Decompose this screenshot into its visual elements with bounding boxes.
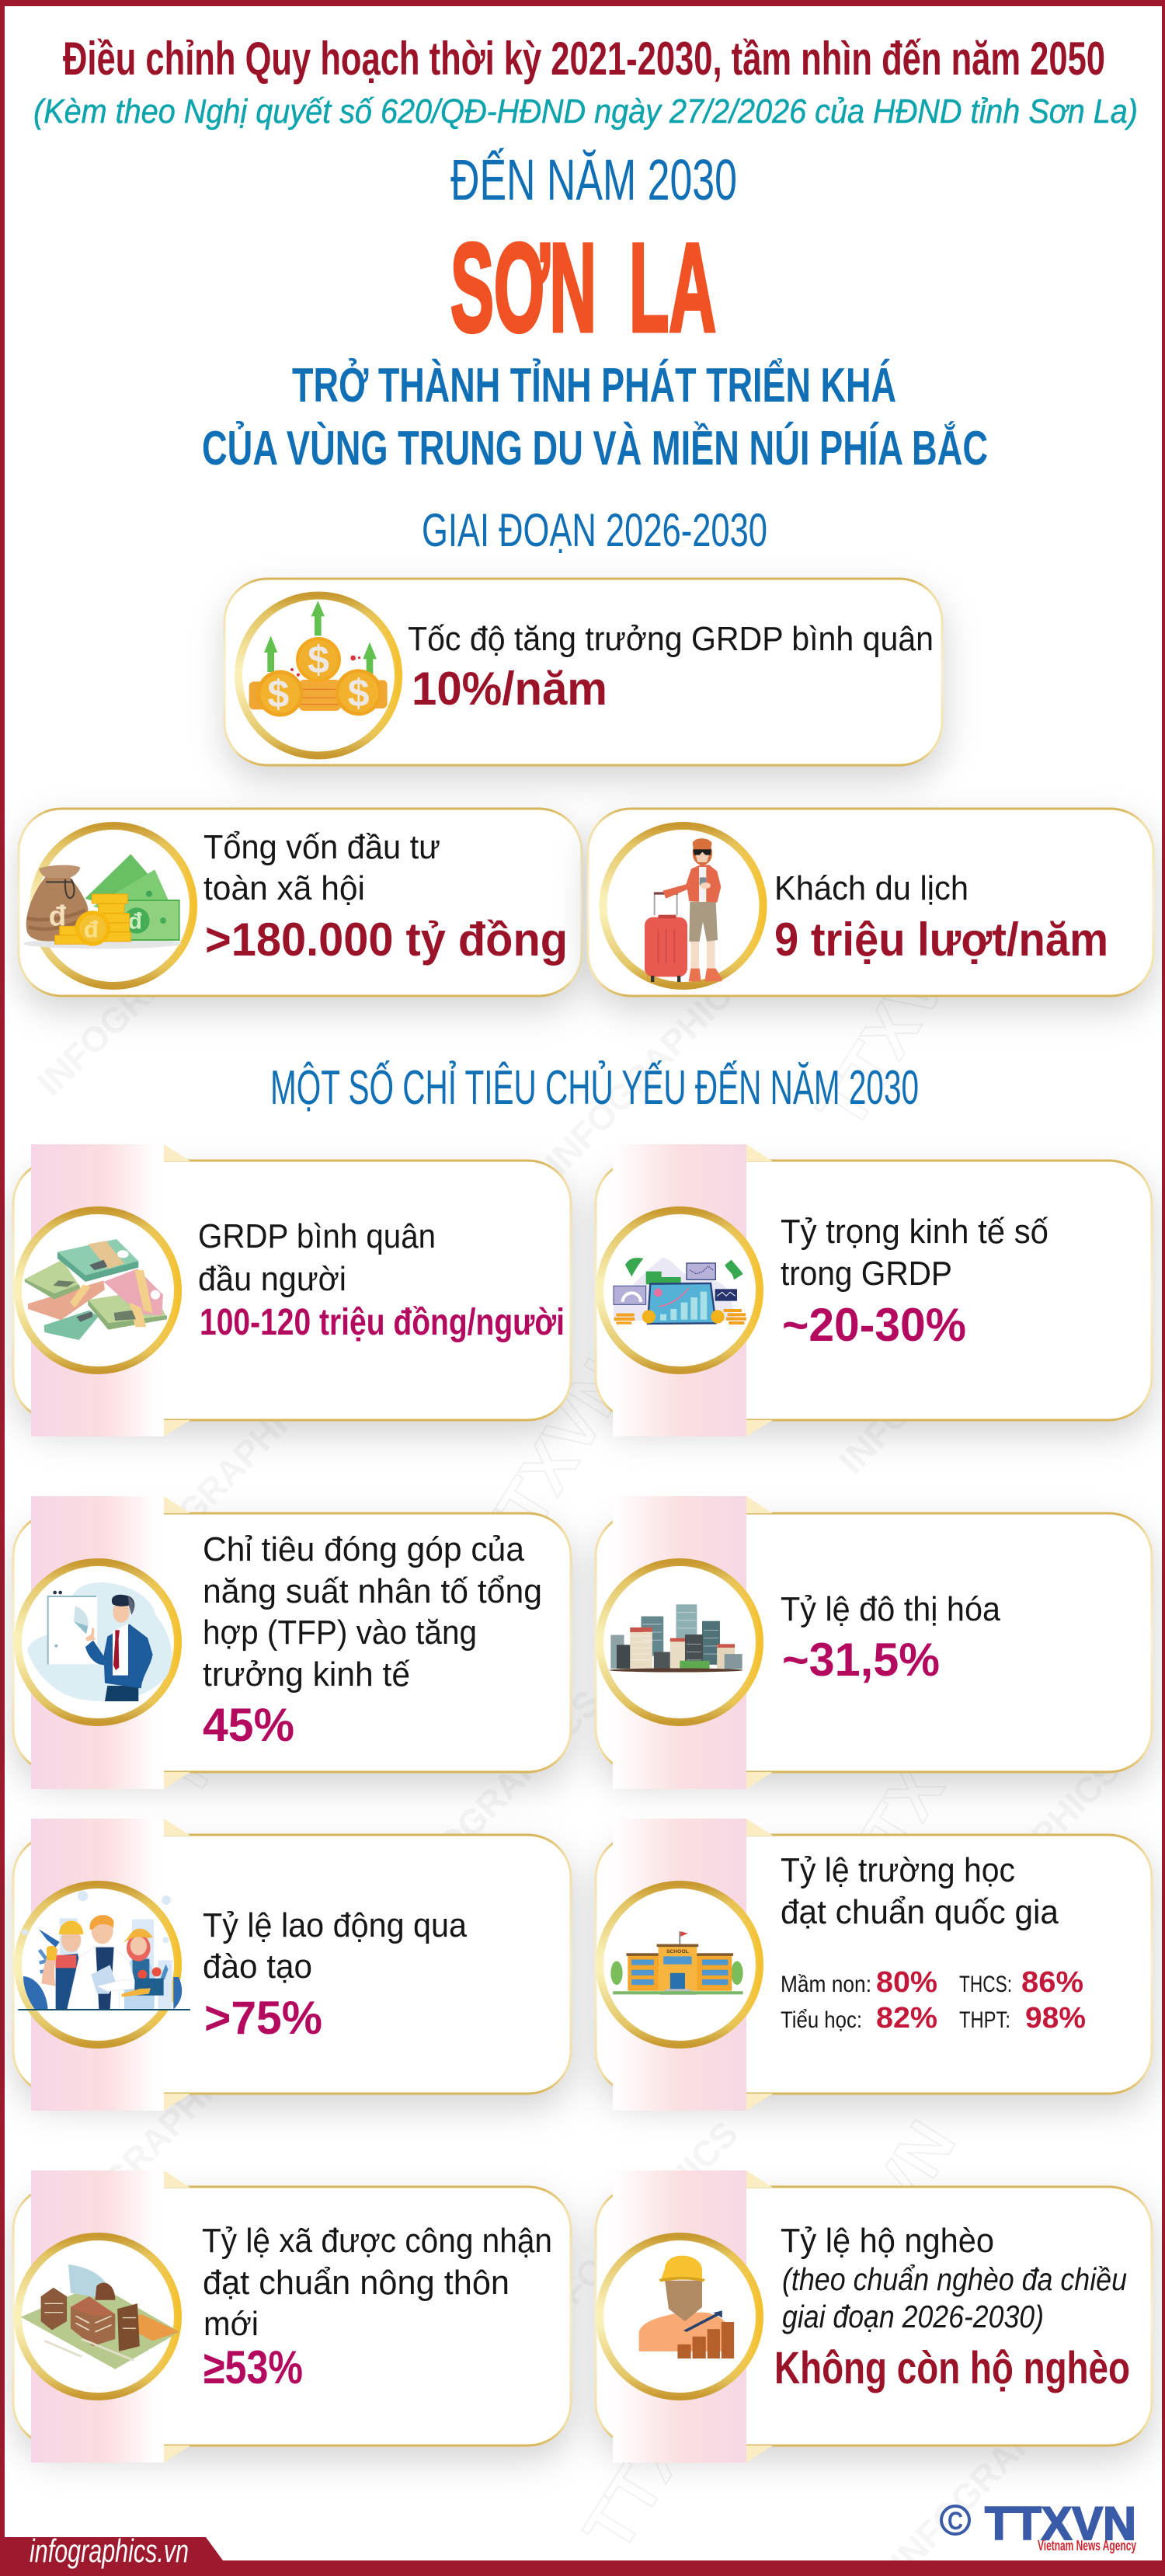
label: [198, 1217, 436, 1298]
label: trong GRDP: [781, 1255, 952, 1293]
label: [203, 1530, 542, 1694]
label: Tỷ lệ đô thị hóa: [781, 1590, 1000, 1628]
label: [781, 1213, 1048, 1293]
watermark pattern: INFOGRAPHICS: [30, 884, 255, 1103]
value: 9 triệu lượt/năm: [774, 914, 1108, 966]
icon: three workers: [18, 1885, 190, 2045]
heading: period: GIAI ĐOẠN 2026-2030: [422, 504, 767, 556]
label: Tổng vốn đầu tư: [203, 828, 440, 866]
icon: worker with rising bars: [600, 2237, 760, 2397]
panel: total investment: [19, 809, 582, 996]
label: Tỷ lệ trường học: [781, 1851, 1015, 1889]
label: Tỷ lệ lao động qua: [203, 1906, 467, 1944]
value: ~31,5%: [782, 1634, 940, 1686]
school level values: THCS:: [959, 1972, 1012, 1997]
label: Chỉ tiêu đóng góp của: [203, 1530, 525, 1568]
label: [781, 2222, 1127, 2334]
label: đạt chuẩn quốc gia: [781, 1893, 1059, 1931]
watermark pattern: INFOGRAPHICS: [831, 1256, 1050, 1481]
heading: goal: [202, 359, 988, 475]
watermark pattern: TTXVN: [786, 2108, 970, 2338]
footer website: infographics.vn: [30, 2532, 189, 2569]
heading: by 2030: ĐẾN NĂM 2030: [450, 148, 737, 212]
watermark pattern: INFOGRAPHICS: [110, 1369, 329, 1594]
label: đào tạo: [203, 1948, 312, 1986]
label: toàn xã hội: [203, 869, 365, 907]
footer band: [0, 2532, 1165, 2576]
label: [202, 2222, 552, 2343]
panel: trained workforce: [13, 1819, 571, 2111]
icon: isometric village: [18, 2237, 179, 2397]
label: Tốc độ tăng trưởng GRDP bình quân: [408, 620, 934, 658]
watermark pattern: TTXVN: [95, 2209, 279, 2439]
school level values: THPT:: [959, 2007, 1010, 2033]
icon: city skyline: [600, 1562, 760, 1722]
label: [203, 1906, 467, 1986]
icon: businessman presenting: [18, 1562, 178, 1722]
panel: new rural communes: [13, 2170, 571, 2463]
value: 100-120 triệu đồng/người: [200, 1302, 565, 1343]
value: ≥53%: [203, 2341, 303, 2393]
watermark pattern: INFOGRAPHICS: [883, 2356, 1102, 2576]
icon: gold coins with arrows: $: [267, 673, 289, 716]
ribbon: [31, 2170, 190, 2463]
watermark pattern: INFOGRAPHICS: [909, 1749, 1128, 1975]
watermark pattern: TTXVN: [95, 1175, 279, 1406]
icon: traveller with suitcase: [603, 826, 763, 986]
watermark pattern: INFOGRAPHICS: [527, 2113, 746, 2338]
school level values: Mầm non:: [781, 1972, 871, 1997]
panel: GRDP per capita: [13, 1144, 571, 1436]
icon: stacks of banknotes: [18, 1210, 178, 1370]
icon: money bag, coins and banknotes: đ: [128, 908, 142, 934]
logo: TTXVN: C: [948, 2507, 963, 2535]
value: ~20-30%: [782, 1299, 966, 1351]
school level values: 80%: [876, 1966, 937, 1999]
school level values: Tiểu học:: [781, 2007, 862, 2033]
panel: digital economy share: [596, 1144, 1152, 1436]
value: >180.000 tỷ đồng: [205, 914, 568, 966]
ribbon: [613, 2170, 773, 2463]
heading: Son La: LA: [629, 218, 716, 358]
label: trưởng kinh tế: [203, 1655, 410, 1694]
ribbon: [613, 1819, 773, 2111]
icon: gold coins with arrows: [238, 595, 398, 755]
icon: school building: SCHOOL: [666, 1948, 689, 1954]
label: [203, 828, 440, 907]
label: GRDP bình quân: [198, 1217, 436, 1255]
label: mới: [203, 2305, 259, 2343]
school level values: 86%: [1021, 1966, 1083, 1999]
heading: Son La: SƠN: [450, 218, 596, 358]
panel: TFP contribution: [13, 1496, 571, 1789]
icon: gold coins with arrows: $: [308, 639, 329, 682]
heading: goal: TRỞ THÀNH TỈNH PHÁT TRIỂN KHÁ: [292, 359, 896, 413]
watermark pattern: TTXVN: [460, 1346, 644, 1577]
ribbon: [31, 1496, 190, 1789]
value: >75%: [204, 1992, 322, 2044]
icon: money bag, coins and banknotes: [23, 826, 193, 986]
label: giai đoạn 2026-2030): [782, 2299, 1044, 2334]
school level values: [781, 1966, 1086, 2035]
watermark pattern: INFOGRAPHICS: [537, 957, 756, 1182]
panel: standard schools: [596, 1819, 1152, 2111]
label: Tỷ lệ hộ nghèo: [781, 2222, 994, 2260]
icon: gold coins with arrows: $: [348, 671, 370, 715]
panel: poverty rate: [596, 2170, 1152, 2463]
watermark pattern: TTXVN: [569, 2333, 753, 2564]
label: Tỷ lệ xã được công nhận: [202, 2222, 552, 2260]
value: 10%/năm: [412, 663, 607, 715]
icon: money bag, coins and banknotes: đ: [49, 900, 67, 932]
label: năng suất nhân tố tổng: [203, 1572, 542, 1610]
watermark pattern: TTXVN: [802, 910, 986, 1141]
ribbon: [31, 1144, 190, 1436]
icon: school building: [600, 1885, 760, 2045]
icon: digital dashboard: [600, 1210, 760, 1370]
label: Tỷ trọng kinh tế số: [781, 1213, 1048, 1251]
panel: GRDP growth: [224, 579, 942, 765]
label: hợp (TFP) vào tăng: [203, 1613, 477, 1652]
watermark pattern: INFOGRAPHICS: [36, 2038, 255, 2263]
panel: urbanisation: [596, 1496, 1152, 1789]
school level values: 82%: [876, 2002, 937, 2035]
ribbon: [613, 1144, 773, 1436]
label: đầu người: [198, 1260, 346, 1298]
watermark pattern: [30, 884, 1128, 2576]
ribbon: [613, 1496, 773, 1789]
panel: tourists: [588, 809, 1153, 996]
label: [781, 1851, 1059, 1931]
value: 45%: [203, 1699, 294, 1751]
logo: TTXVN: TTXVN: [985, 2498, 1136, 2550]
ribbon: [31, 1819, 190, 2111]
watermark pattern: TTXVN: [825, 1673, 1009, 1903]
watermark pattern: INFOGRAPHICS: [389, 1682, 608, 1907]
watermark pattern: TTXVN: [141, 1579, 325, 1810]
label: đạt chuẩn nông thôn: [203, 2264, 509, 2302]
label: Khách du lịch: [774, 869, 969, 907]
icon: money bag, coins and banknotes: đ: [84, 917, 99, 943]
school level values: 98%: [1025, 2002, 1086, 2035]
